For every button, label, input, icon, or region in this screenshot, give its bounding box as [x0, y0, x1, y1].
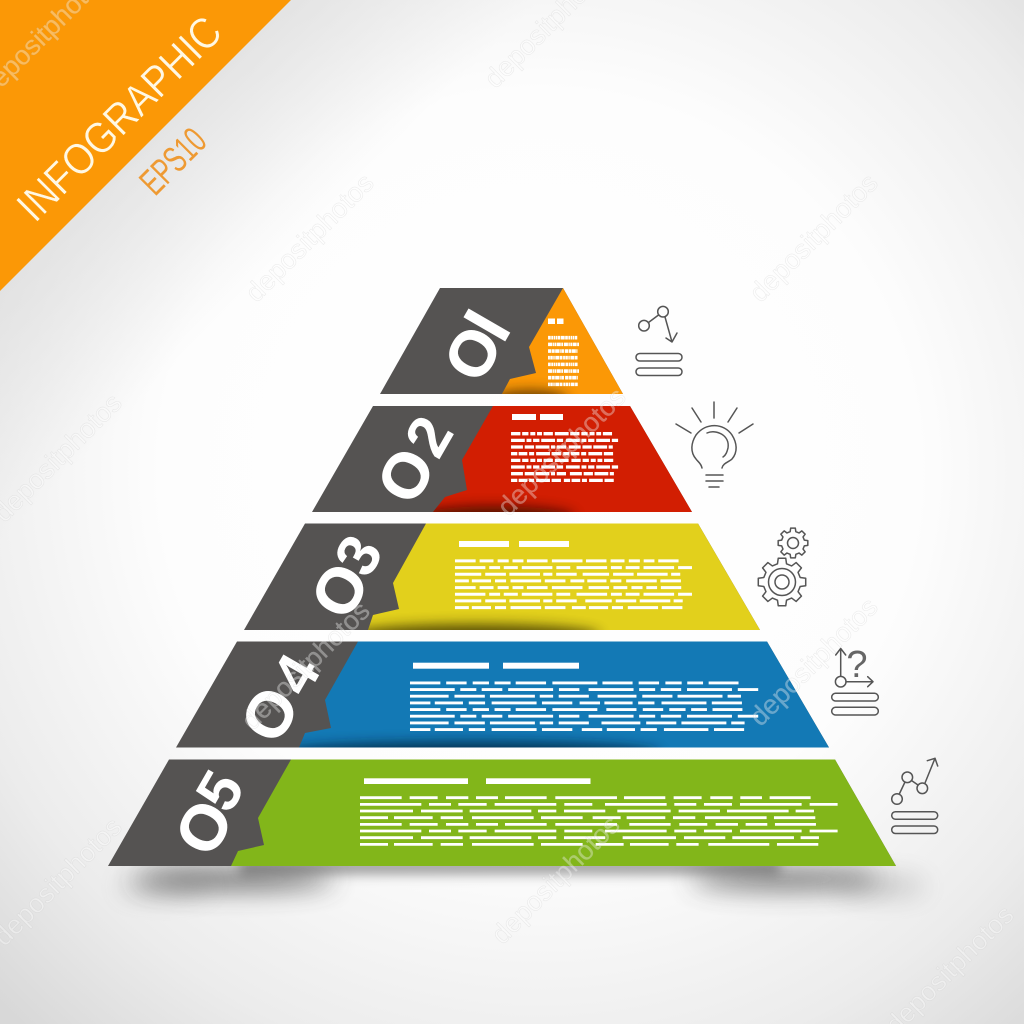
- banner subtitle: EPS10: [132, 120, 214, 203]
- tier 2 heading bars: [512, 414, 563, 420]
- tier 2 number tab: [312, 406, 692, 512]
- tier 3 number tab: [244, 524, 760, 630]
- corner banner: [0, 0, 291, 291]
- icon: axes with question mark: ?: [846, 644, 868, 686]
- tier 3 colour panel: [368, 524, 760, 630]
- tier 5 number: 5: [183, 760, 257, 822]
- pyramid tier 1: [380, 288, 623, 394]
- tier 2 panel shadow: [433, 496, 580, 512]
- tier 3 text lines: [455, 561, 692, 608]
- watermark: depositphotos: [744, 592, 884, 732]
- pyramid tier 2: [312, 406, 692, 512]
- tier 2 text lines: [511, 434, 618, 480]
- watermark: depositphotos: [486, 810, 626, 950]
- tier 1 number tab: [380, 288, 623, 394]
- icon: gears: [758, 528, 808, 606]
- pyramid tier 5: [108, 760, 896, 867]
- tier 5 number tab: [108, 760, 896, 866]
- tier 4 colour panel: [299, 642, 829, 748]
- tier 2 number: [362, 405, 466, 515]
- tier 2 colour panel: [433, 406, 692, 512]
- tier 5 number: O: [160, 788, 247, 867]
- tier 5 number: [160, 760, 257, 867]
- tier 1 number: I: [448, 297, 526, 353]
- tier 4 number: [226, 643, 334, 754]
- icon: axes with question mark: [832, 644, 878, 715]
- tier 3 number: [296, 524, 396, 630]
- tier 3 heading bars: [459, 541, 569, 547]
- tier 1 text lines: [548, 338, 579, 384]
- watermark: depositphotos: [240, 168, 380, 308]
- tier 3 number: 3: [321, 524, 396, 586]
- pyramid tier 4: [176, 642, 829, 748]
- watermark: depositphotos: [492, 382, 632, 522]
- watermark: depositphotos: [744, 168, 884, 308]
- pyramid tier 3: [244, 524, 760, 630]
- tier 4 panel shadow: [299, 733, 662, 748]
- tier 4 number: 4: [259, 643, 334, 705]
- tier 5 heading bars: [364, 778, 590, 784]
- tier 4 number tab: [176, 642, 829, 748]
- tier 2 number: O: [362, 436, 449, 515]
- tier 1 panel shadow: [502, 381, 573, 394]
- tier 5 colour panel: [231, 760, 896, 866]
- tier 3 panel shadow: [368, 614, 604, 630]
- tier 1 number: O: [429, 314, 516, 393]
- tier 1 heading bars: [548, 318, 564, 324]
- tier 2 number: 2: [392, 405, 466, 467]
- tier 4 heading bars: [413, 663, 579, 669]
- tier 4 number: O: [226, 675, 313, 754]
- banner triangle: [0, 0, 291, 291]
- watermark: depositphotos: [236, 596, 376, 736]
- icon: rising chart: [892, 758, 938, 834]
- tier 1 colour panel: [502, 288, 623, 394]
- icon: light bulb: [676, 402, 753, 487]
- tier 3 number: O: [296, 551, 383, 630]
- tier 5 text lines: [360, 798, 838, 844]
- ground shadow: [120, 860, 925, 895]
- tier 4 text lines: [410, 683, 758, 730]
- icon: nodes with arrow: [636, 306, 682, 376]
